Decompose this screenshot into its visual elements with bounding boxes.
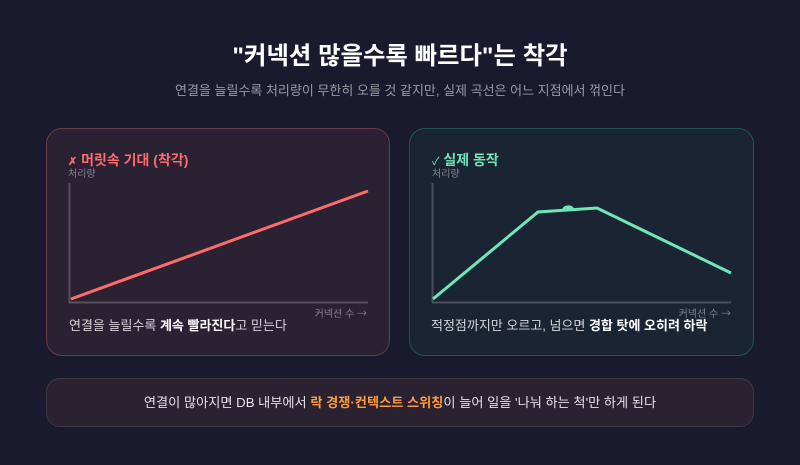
title: "커넥션 많을수록 빠르다"는 착각	[232, 43, 568, 70]
callout text: 연결이 많아지면 DB 내부에서 락 경쟁·컨텍스트 스위칭이 늘어 일을 '나눠 하는 척'만 하게 된다	[144, 395, 656, 410]
x axis label: 커넥션 수 →	[315, 305, 367, 320]
panel caption: 연결을 늘릴수록 계속 빨라진다고 믿는다	[69, 318, 287, 333]
panel heading: expectation: ✗ 머릿속 기대 (착각)	[68, 152, 188, 169]
panel: actual behavior	[409, 128, 754, 356]
y axis label: 처리량	[68, 169, 96, 180]
panel heading: actual: ✓ 실제 동작	[432, 152, 499, 169]
peak marker	[562, 205, 574, 210]
callout	[46, 378, 754, 427]
y axis label: 처리량	[432, 169, 460, 180]
line chart: linear expectation	[68, 183, 368, 304]
line chart: actual curve	[432, 183, 732, 304]
x axis label: 커넥션 수 →	[679, 305, 731, 320]
panel: expectation	[46, 128, 390, 356]
subtitle: 연결을 늘릴수록 처리량이 무한히 오를 것 같지만, 실제 곡선은 어느 지점에서 꺾인다	[175, 83, 625, 98]
panel caption: 적정점까지만 오르고, 넘으면 경합 탓에 오히려 하락	[431, 318, 707, 333]
